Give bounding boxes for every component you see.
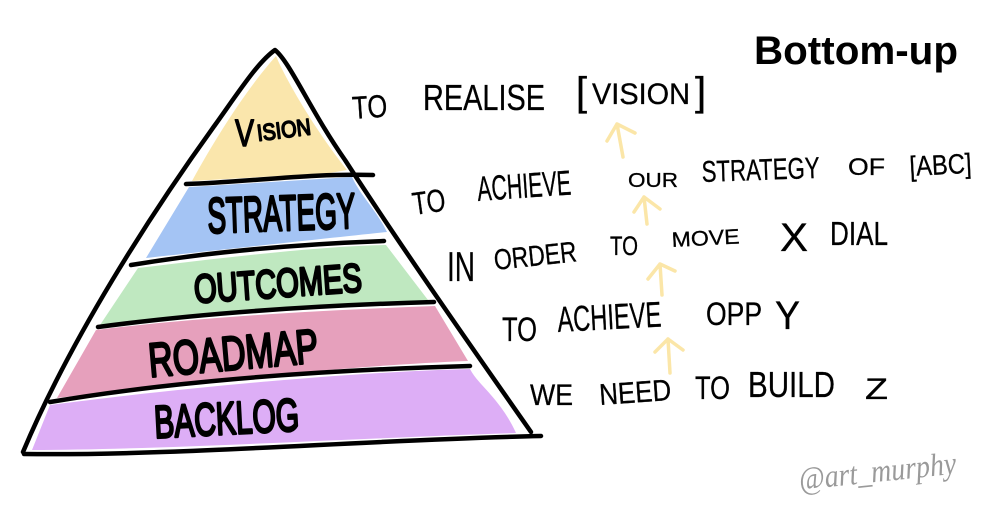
layer: backlog fill	[32, 369, 516, 450]
line: to realise vision: [	[576, 70, 587, 114]
line: we need to build z: WE	[530, 379, 573, 412]
line: to achieve our strategy: TO	[410, 182, 448, 222]
layer: roadmap fill	[57, 306, 468, 398]
line: to realise vision: VISION	[592, 78, 690, 111]
line: in order to move x dial: ORDER	[492, 236, 578, 277]
signature: @art_murphy	[797, 445, 959, 497]
line: to achieve opp y: Y	[775, 294, 800, 338]
line: to realise vision: REALISE	[423, 77, 545, 118]
arrow: build to opportunity	[655, 339, 683, 373]
divider: roadmap / backlog	[50, 366, 470, 402]
line: in order to move x dial: X	[780, 216, 808, 260]
line: we need to build z: Z	[865, 373, 888, 406]
label: outcomes: OUTCOMES	[193, 256, 363, 312]
pyramid	[23, 50, 541, 454]
line: to achieve our strategy: OUR	[628, 170, 678, 192]
line: to achieve opp y: ACHIEVE	[556, 294, 662, 340]
layer: outcomes fill	[100, 245, 428, 325]
line: to achieve our strategy: OF	[848, 154, 885, 181]
arrow: opportunity to dial	[648, 264, 675, 295]
line: we need to build z: TO	[695, 370, 730, 406]
line: to realise vision: ]	[695, 70, 706, 114]
line: in order to move x dial: TO	[610, 231, 638, 261]
layer: vision fill	[192, 56, 347, 181]
label: strategy: STRATEGY	[206, 183, 356, 244]
label: roadmap: ROADMAP	[146, 320, 320, 388]
line: in order to move x dial: MOVE	[671, 225, 740, 252]
divider: strategy / outcomes	[131, 241, 384, 265]
line: to achieve opp y	[502, 294, 800, 349]
pyramid base	[24, 436, 541, 454]
line: to realise vision	[351, 70, 706, 126]
line: to achieve our strategy: STRATEGY	[701, 152, 820, 189]
line: to achieve our strategy: ACHIEVE	[476, 164, 572, 209]
line: in order to move x dial: IN	[447, 243, 475, 290]
line: in order to move x dial: DIAL	[830, 215, 888, 252]
label: vision: ISION	[255, 114, 312, 146]
line: in order to move x dial	[447, 215, 888, 290]
line: to achieve our strategy	[410, 148, 972, 222]
label: vision: V	[235, 113, 254, 155]
layer: strategy fill	[146, 177, 387, 258]
line: we need to build z: NEED	[598, 374, 672, 412]
label: vision	[235, 113, 312, 155]
divider: vision / strategy	[186, 175, 373, 184]
line: to realise vision: TO	[351, 88, 388, 126]
arrow: dial to strategy	[634, 197, 660, 224]
pyramid outline	[23, 50, 531, 452]
line: to achieve opp y: TO	[502, 311, 537, 349]
divider: outcomes / roadmap	[98, 302, 434, 327]
arrow: strategy to vision	[607, 124, 635, 157]
line: we need to build z: BUILD	[748, 364, 835, 405]
line: we need to build z	[530, 364, 888, 412]
title: Bottom-up	[754, 29, 958, 73]
line: to achieve opp y: OPP	[706, 296, 762, 332]
label: backlog: BACKLOG	[153, 388, 300, 448]
line: to achieve our strategy: [ABC]	[909, 148, 972, 182]
